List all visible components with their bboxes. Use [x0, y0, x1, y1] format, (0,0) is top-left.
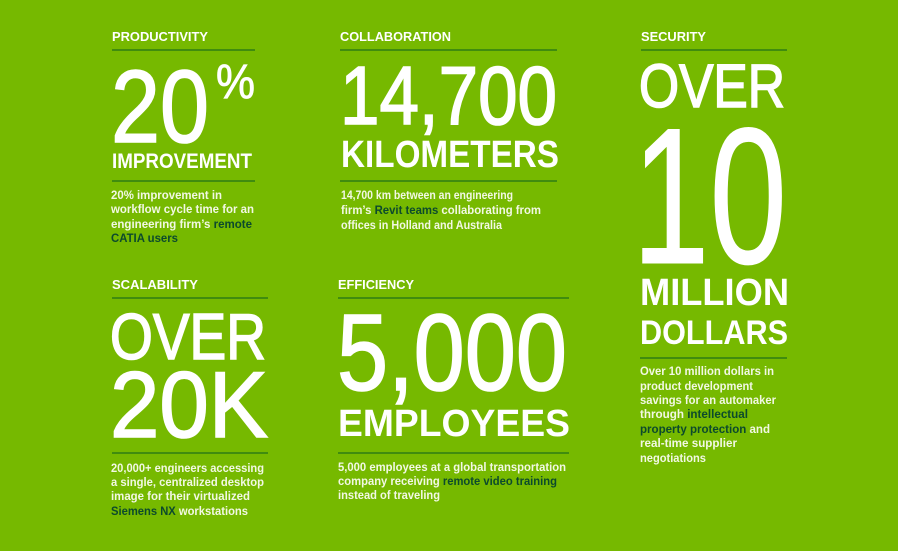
panel: efficiency [337, 277, 570, 502]
body text: scalability: Siemens NX workstations [111, 506, 248, 518]
subheading: improvement: IMPROVEMENT [112, 150, 252, 173]
subheading: million: MILLION [640, 272, 789, 314]
heading: productivity: PRODUCTIVITY [112, 29, 208, 44]
big text: over: OVER [110, 300, 266, 373]
body text: collaboration: firm’s Revit teams collaborating from [341, 205, 541, 217]
body text: efficiency [338, 462, 566, 502]
panel: productivity [110, 29, 255, 245]
big number: 10: 10 [632, 88, 787, 305]
body text: productivity [110, 190, 254, 245]
body text: productivity: 20% improvement in [111, 190, 222, 202]
heading: security: SECURITY [641, 29, 706, 44]
body text: scalability: 20,000+ engineers accessing [111, 463, 264, 475]
percent sign: % [216, 56, 255, 109]
panel: security [632, 29, 789, 465]
body text: security [640, 366, 777, 465]
body text: security: product development [640, 381, 753, 393]
panel: collaboration [340, 29, 559, 232]
body text: security: real-time supplier [640, 438, 738, 450]
body text: efficiency: instead of traveling [338, 490, 440, 502]
heading: scalability: SCALABILITY [112, 277, 198, 292]
subheading: kilometers: KILOMETERS [341, 134, 559, 176]
big number: 5,000: 5,000 [337, 292, 567, 414]
heading: collaboration: COLLABORATION [340, 29, 451, 44]
subheading: dollars: DOLLARS [640, 314, 788, 352]
subheading: employees: EMPLOYEES [338, 403, 570, 445]
body text: security: savings for an automaker [640, 395, 777, 407]
heading: efficiency: EFFICIENCY [338, 277, 414, 292]
body text: scalability: a single, centralized desktop [111, 477, 264, 489]
body text: scalability [111, 463, 264, 518]
body text: productivity: workflow cycle time for an [110, 204, 254, 216]
body text: security: Over 10 million dollars in [640, 366, 774, 378]
body text: security: property protection and [640, 424, 770, 436]
body text: collaboration [341, 190, 541, 232]
body text: collaboration: offices in Holland and Australia [341, 220, 503, 232]
body text: security: negotiations [640, 453, 706, 465]
big number: 14,700: 14,700 [340, 49, 557, 142]
body text: efficiency: company receiving remote video training [338, 476, 557, 488]
panel: scalability [110, 277, 268, 518]
big number: 20K: 20K [110, 352, 268, 457]
body text: productivity: CATIA users [111, 233, 178, 245]
body text: security: through intellectual [640, 409, 748, 421]
body text: scalability: image for their virtualized [111, 491, 250, 503]
body text: collaboration: 14,700 km between an engineering [341, 190, 513, 202]
body text: efficiency: 5,000 employees at a global transportation [338, 462, 566, 474]
big text: over: OVER [639, 52, 785, 120]
big number: 20: 20 [111, 49, 209, 164]
body text: productivity: engineering firm’s remote [111, 219, 252, 231]
